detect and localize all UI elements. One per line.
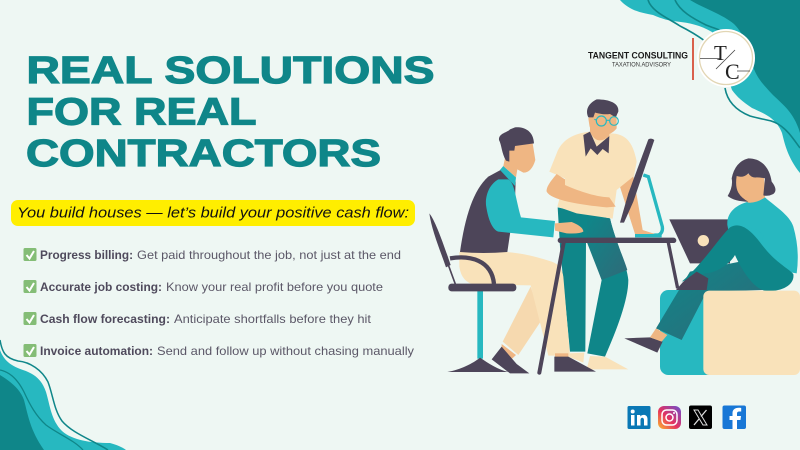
company name: TANGENT CONSULTING — [588, 50, 688, 62]
item: accurate job costing — [24, 280, 383, 294]
logo emblem: C — [725, 59, 740, 84]
item: invoice automation: Invoice automation: — [40, 344, 153, 358]
social icons — [628, 406, 746, 429]
checklist — [24, 248, 414, 358]
company tagline: TAXATION.ADVISORY — [612, 62, 671, 68]
icon: Facebook — [722, 406, 746, 429]
standing man with glasses — [547, 99, 655, 369]
desk top and legs — [539, 238, 678, 373]
item: progress billing — [24, 248, 401, 262]
item: invoice automation — [24, 344, 414, 358]
icon: Instagram — [658, 406, 681, 429]
logo emblem: T — [714, 41, 727, 65]
logo: Tangent Consulting — [588, 29, 755, 87]
item: cash flow forecasting — [24, 312, 372, 326]
title: CONTRACTORS — [26, 133, 381, 175]
subtitle highlight: You build houses — let’s build your positive cash flow: — [17, 204, 409, 222]
item: accurate job costing: Accurate job costing: — [40, 280, 162, 294]
item: progress billing: Progress billing: — [40, 248, 133, 262]
logo divider — [692, 38, 694, 80]
item: invoice automation: Send and follow up without chasing manually — [157, 344, 414, 358]
item: cash flow forecasting: Anticipate shortfalls before they hit — [174, 312, 372, 326]
decorative corner: bottom left waves — [0, 340, 126, 450]
subtitle highlight — [11, 200, 415, 226]
icon: LinkedIn — [628, 406, 650, 429]
seated woman with laptop — [624, 158, 800, 375]
desk and monitor — [563, 175, 662, 237]
decorative corner: top right waves — [620, 0, 800, 173]
seated man at desk — [429, 127, 596, 373]
icon: X — [689, 406, 712, 429]
item: cash flow forecasting: Cash flow forecasting: — [40, 312, 170, 326]
item: accurate job costing: Know your real profit before you quote — [166, 280, 383, 294]
logo emblem — [697, 29, 755, 87]
title — [26, 50, 434, 175]
title: REAL SOLUTIONS — [26, 50, 434, 92]
item: progress billing: Get paid throughout the job, not just at the end — [137, 248, 401, 262]
title: FOR REAL — [26, 92, 256, 134]
illustration: three people working at a desk — [429, 99, 800, 375]
